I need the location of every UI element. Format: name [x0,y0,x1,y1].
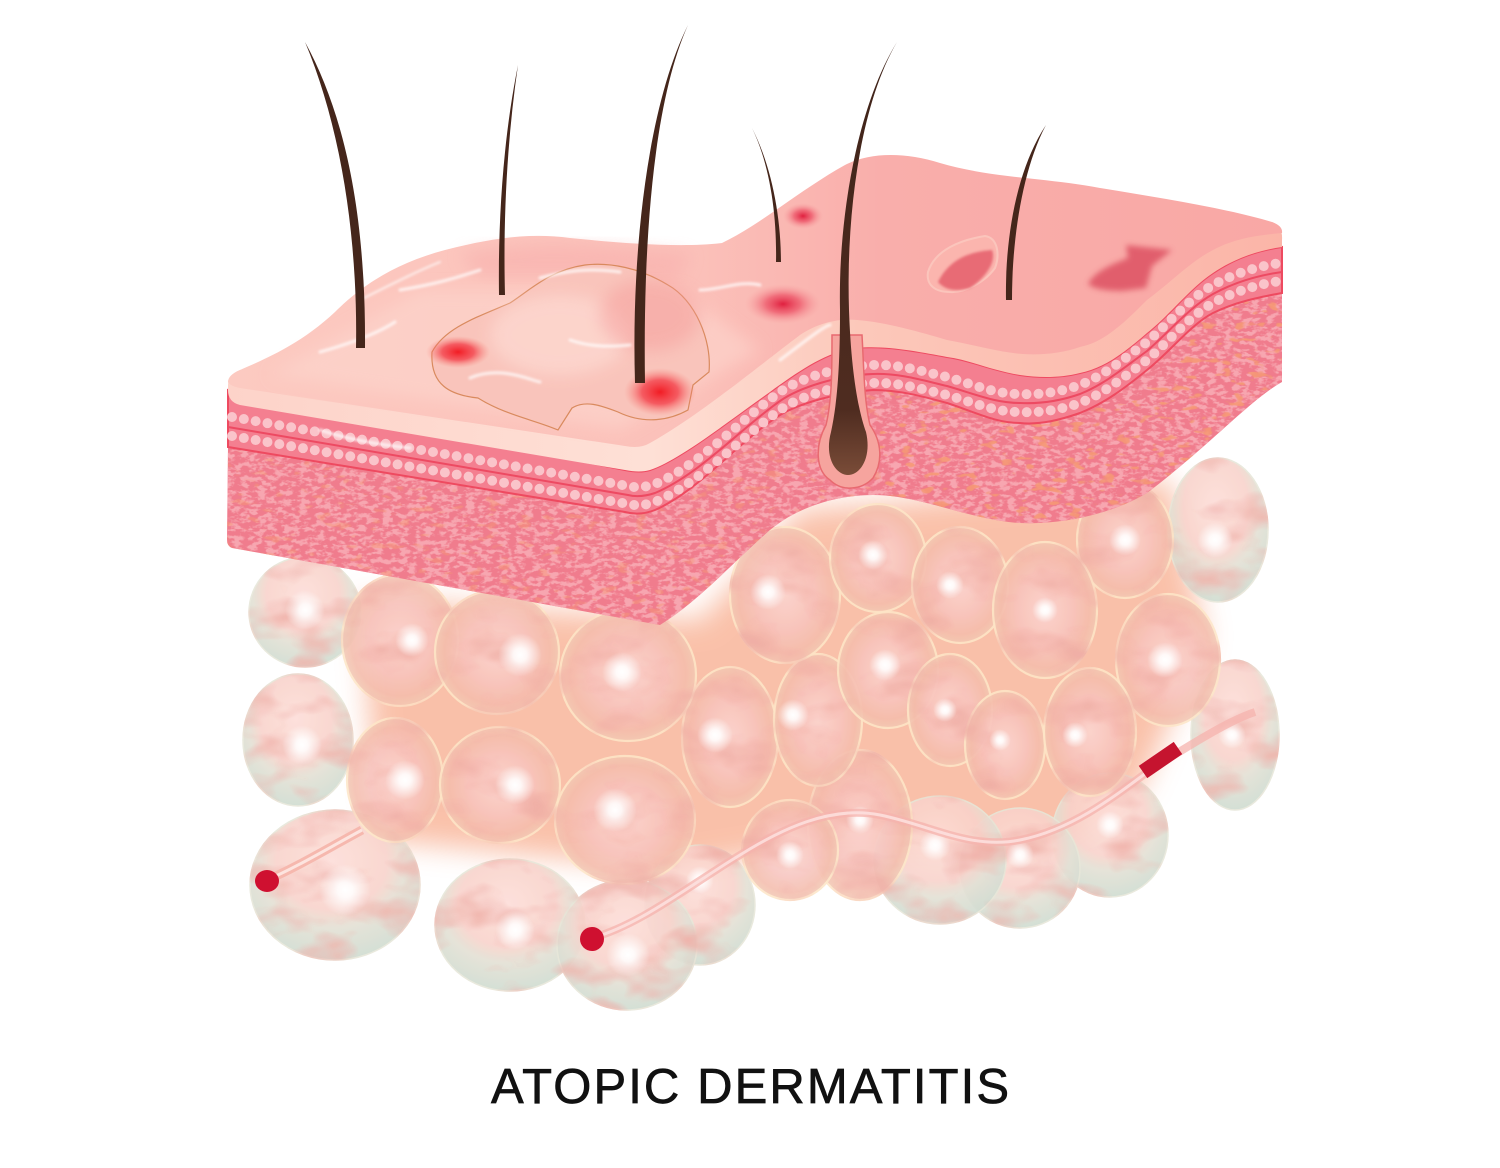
top row of fat cells [249,504,1097,741]
hair 1 [305,42,365,348]
fat cell bodies [243,458,1279,1010]
raised lesion right [928,236,998,292]
hair 3 [634,25,688,383]
hair 2 [499,65,518,295]
dermis layer [220,285,1290,630]
right blood vessel [580,712,1255,951]
back shading [460,246,690,275]
irregular lesion far right [1088,245,1172,291]
red spot centre [745,284,821,324]
lesion pale centre [490,295,630,375]
title: ATOPIC DERMATITIS [491,1060,1009,1114]
cell nuclei [282,522,1246,977]
hair 6 [1006,125,1046,300]
right edge fat cells [1077,458,1279,810]
left blood vessel [255,830,362,892]
connective tissue glow [360,480,1205,870]
lesion red patch left [426,336,490,368]
hair follicle bulb and shaft [829,42,897,475]
fat cell layer [243,458,1279,1010]
skin surface [228,155,1282,471]
lesion pink shadow [600,279,700,351]
hair follicle sheath [818,335,880,488]
red spot back [783,203,823,229]
lesion red patch right [624,368,696,416]
bottom row of fat cells [250,750,1168,1010]
front lip [228,222,1282,472]
pale front shading [270,290,760,430]
epidermis cell bands [228,247,1282,514]
middle row of fat cells [243,612,1136,884]
hair 4 [752,128,781,262]
surface highlights [320,262,830,448]
upper cell row [232,263,1280,487]
skin block [220,25,1290,630]
lower cell row [232,281,1280,505]
top face [228,155,1282,447]
big eczema lesion [426,264,709,430]
